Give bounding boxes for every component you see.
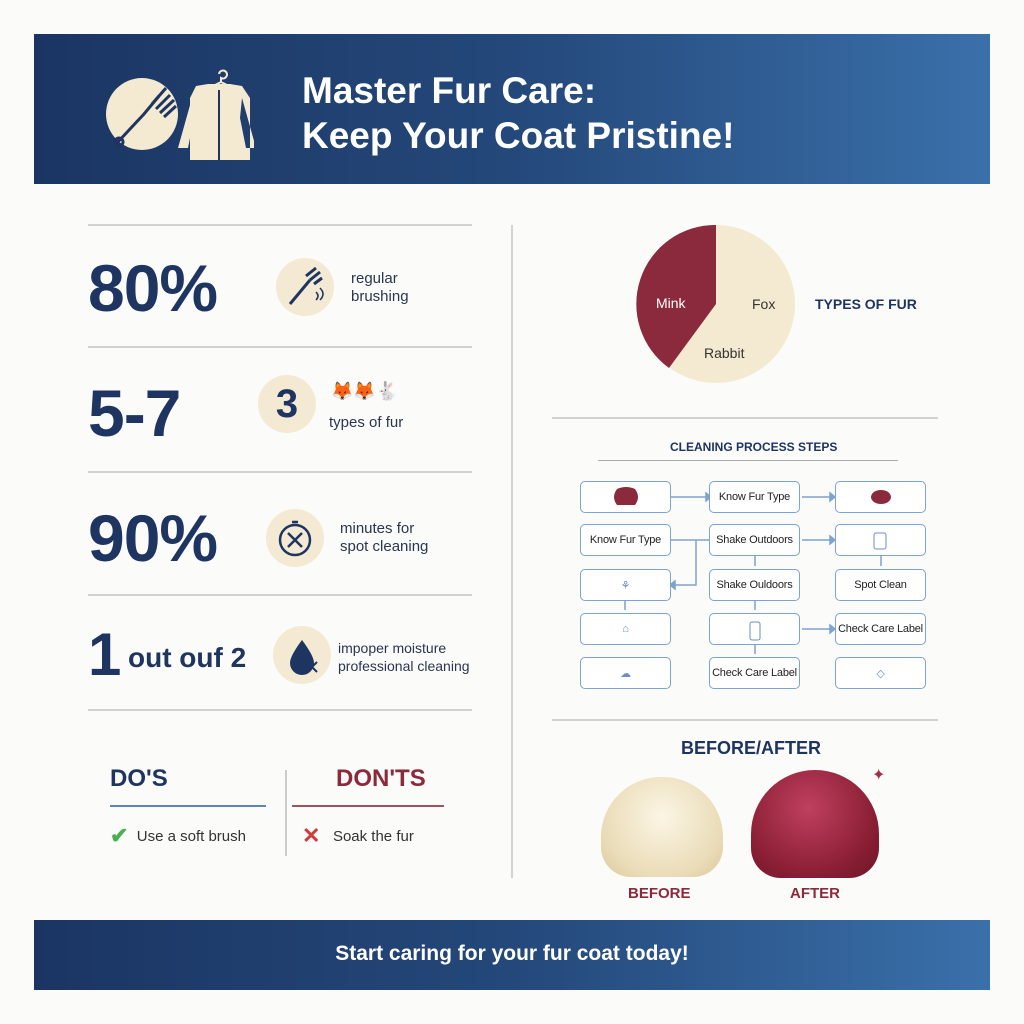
stat: 1 out of 2 [88,621,470,688]
before/after: BEFORE [628,885,691,902]
stat: 90%: spot cleaning [340,538,428,555]
icon: brush [276,258,334,316]
pie chart: types of fur: TYPES OF FUR [815,296,917,312]
do's: ✔ Use a soft brush [110,823,246,848]
stat: 90%: minutes for [340,520,414,537]
cleaning process flowchart [580,440,926,689]
cleaning process flowchart: ☁ [620,668,631,680]
after fur [751,770,879,878]
cleaning process flowchart: Check Care Label [838,623,923,635]
stat: 80% [88,251,409,325]
do's: DO'S [110,765,168,792]
before fur [601,777,723,877]
cleaning process flowchart: ◇ [876,668,885,680]
cleaning process flowchart: ⌂ [622,623,629,635]
title: Master Fur Care: [302,70,596,111]
cleaning process flowchart: Shake Outdoors [716,534,793,546]
footer banner: Start caring for your fur coat today! [335,942,689,965]
stat: 80%: 80% [88,251,217,325]
don'ts: DON'TS [336,765,426,792]
title [302,70,734,156]
stat: 1 out of 2: 1 [88,621,121,688]
pie chart: types of fur: Mink [656,295,686,311]
icon: brush and coat [106,70,254,160]
icon: 3: 3 [276,382,298,426]
stat: 90%: 90% [88,501,217,575]
pie chart: types of fur [636,225,917,383]
stat: 5-7 [88,375,403,450]
before/after [601,738,885,902]
icon: 3 [258,375,316,433]
do's [110,765,266,848]
cleaning process flowchart: Spot Clean [854,579,907,591]
stat: 80%: brushing [351,288,409,305]
cleaning process flowchart: Know Fur Type [719,491,790,503]
title: Keep Your Coat Pristine! [302,115,734,156]
icon: drop [273,626,331,684]
cleaning process flowchart: ⚘ [621,580,630,592]
stat: 1 out of 2: professional cleaning [338,658,470,674]
footer banner [34,920,990,990]
cleaning process flowchart: Check Care Label [712,667,797,679]
don'ts: ✕ Soak the fur [302,823,414,848]
cleaning process flowchart: CLEANING PROCESS STEPS [670,440,837,454]
stat: 5-7: 🦊🦊🐇 [331,381,398,401]
before/after: BEFORE/AFTER [681,738,821,758]
pie chart: types of fur: Fox [752,296,775,312]
icon: timer [266,509,324,567]
header banner [34,34,990,184]
before/after: ✦ [872,767,885,784]
don'ts [292,765,444,848]
before/after: AFTER [790,885,840,902]
cleaning process flowchart: Shake Ouldoors [716,579,793,591]
stat: 90% [88,501,428,575]
stat: 1 out of 2: out ouf 2 [128,642,246,673]
stat: 1 out of 2: impoper moisture [338,640,446,656]
cleaning process flowchart: Know Fur Type [590,534,661,546]
stat: 5-7: types of fur [329,414,403,431]
stat: 80%: regular [351,270,398,287]
stat: 5-7: 5-7 [88,376,180,450]
pie chart: types of fur: Rabbit [704,345,744,361]
